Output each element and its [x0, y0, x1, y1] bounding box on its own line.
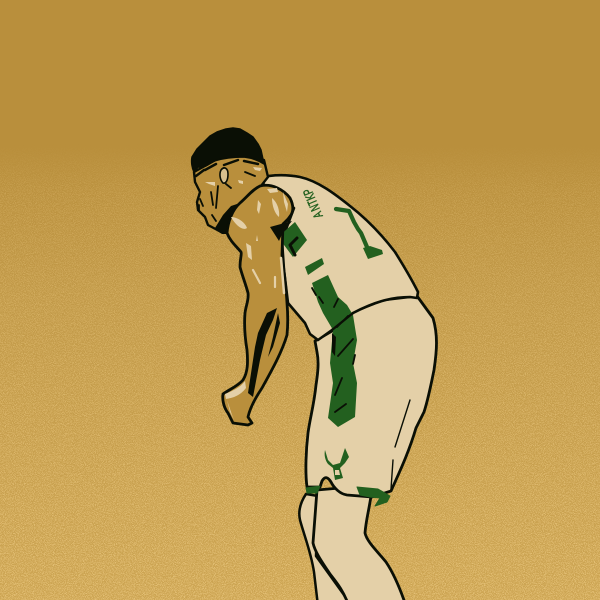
- shorts crease line: [391, 400, 410, 489]
- arm and shoulder: [223, 185, 293, 425]
- stripe folds: [312, 288, 355, 412]
- shorts: [306, 296, 436, 506]
- face highlight: [205, 167, 262, 186]
- jersey name: A NTKP: [300, 186, 326, 221]
- hairline shadow: [196, 160, 258, 176]
- ear: [220, 168, 228, 183]
- fist highlight: [225, 381, 246, 420]
- jersey hem over stripe: [332, 313, 353, 330]
- side stripe: [312, 275, 357, 427]
- jersey: [257, 175, 418, 427]
- shorts hem trim left: [306, 486, 320, 493]
- arm edge highlight: [281, 258, 284, 293]
- jersey number foot: [363, 246, 383, 259]
- armhole panel: [278, 222, 307, 257]
- shoulder highlights: [231, 188, 288, 260]
- shorts hem trim right: [357, 487, 390, 506]
- jersey number: [336, 209, 367, 247]
- background: ochre gradient with grain: [0, 163, 600, 600]
- back leg: [299, 494, 352, 600]
- shoulder shadow: [270, 221, 292, 241]
- forearm inner shadow: [248, 308, 277, 397]
- face details: [199, 172, 255, 221]
- armhole mark: [290, 238, 297, 255]
- front leg: [313, 488, 406, 600]
- jaw shadow: [208, 203, 240, 234]
- illustration: basketball player bending forward: [0, 127, 600, 600]
- figure: [192, 128, 436, 600]
- side tick: [305, 258, 324, 275]
- stripe shadow: [332, 333, 336, 356]
- logo: buck antlers: [325, 448, 349, 480]
- head: [192, 128, 268, 234]
- arm highlights: [253, 270, 275, 287]
- forearm inner shadow right: [268, 313, 280, 357]
- hair: [192, 128, 264, 172]
